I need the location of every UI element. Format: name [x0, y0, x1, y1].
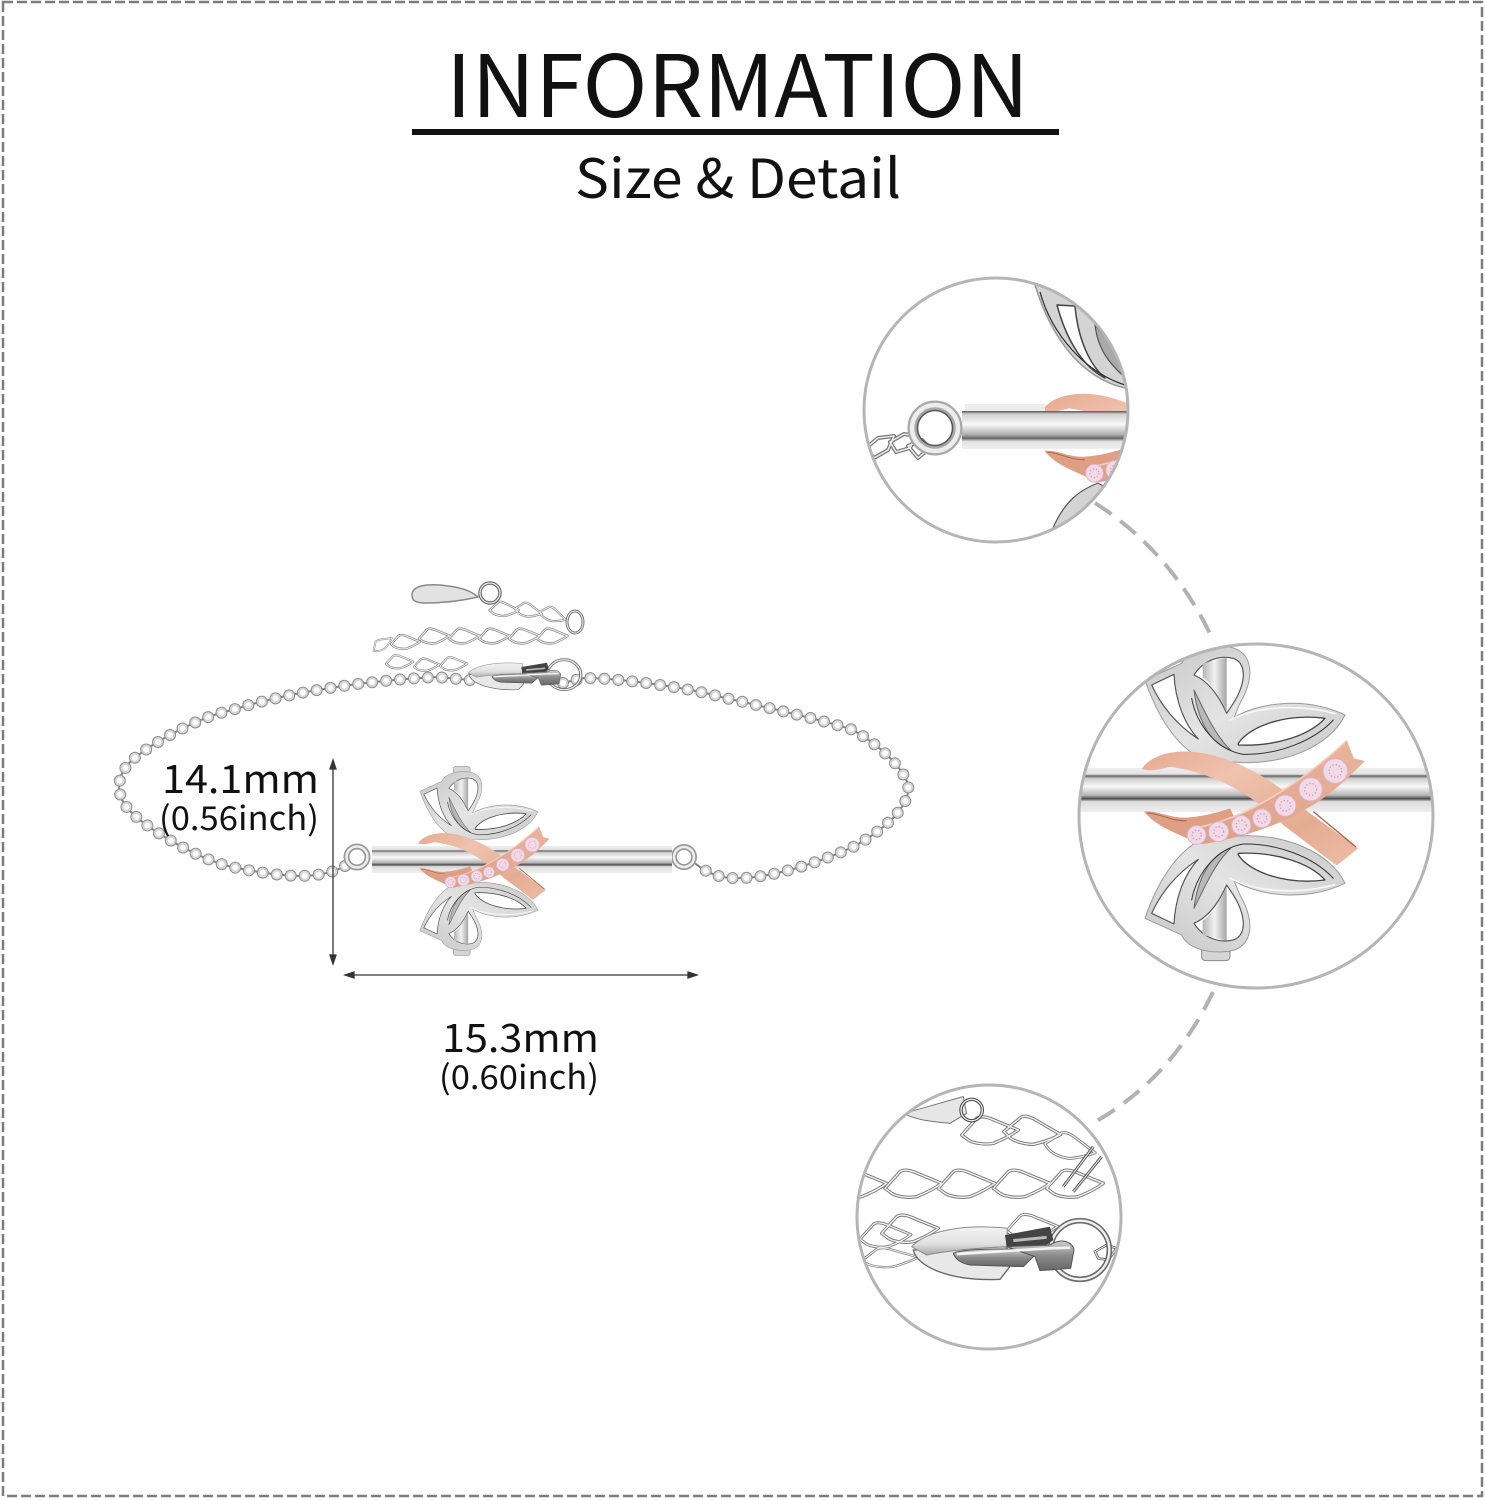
extender chain links, outer [370, 600, 568, 671]
lobster clasp [468, 660, 581, 690]
circle outline [857, 1085, 1121, 1349]
extender links, outer [830, 1114, 1103, 1267]
chain fragment [866, 434, 930, 458]
upper dashed connector [1095, 503, 1213, 640]
silver bar [372, 846, 672, 873]
ribbon fragment [1044, 394, 1126, 482]
rose gold ribbon [418, 826, 550, 900]
detail circle: bar end and ring [862, 276, 1130, 544]
width label: 15.3mm [442, 1008, 599, 1064]
width dimension arrow [345, 972, 697, 978]
lobster clasp [912, 1221, 1109, 1280]
extender links, highlight [830, 1114, 1103, 1267]
detail circle: extender chain and clasp [830, 1085, 1121, 1349]
bar [1078, 768, 1434, 812]
height label: 14.1mm [162, 749, 319, 805]
extender rings [480, 583, 583, 633]
extender tab [412, 585, 478, 603]
circle outline [1079, 644, 1433, 988]
subtitle: Size & Detail [575, 135, 901, 214]
title underline [412, 129, 1059, 135]
height label [159, 749, 319, 840]
lower dashed connector [1095, 992, 1213, 1122]
butterfly wings [1145, 638, 1345, 961]
height label: (0.56inch) [159, 792, 319, 840]
circle outline [864, 278, 1128, 542]
chain [119, 677, 908, 878]
side link [1063, 1147, 1102, 1192]
height dimension arrow [330, 760, 336, 964]
width label [439, 1008, 599, 1099]
tab end [903, 1097, 967, 1123]
wing fragment [1034, 285, 1125, 528]
right end ring [674, 847, 694, 867]
detail circle: butterfly and ribbon [1078, 638, 1434, 988]
ribbon with stones [1142, 740, 1365, 866]
bracelet illustration [119, 583, 908, 956]
bar [962, 404, 1132, 449]
end link [1095, 1245, 1117, 1260]
butterfly wings [420, 767, 538, 956]
width label: (0.60inch) [439, 1051, 599, 1099]
left end ring [346, 846, 368, 868]
ring [912, 405, 958, 451]
title: INFORMATION [446, 17, 1029, 142]
jump ring [961, 1099, 982, 1121]
extender chain links, highlight [370, 600, 568, 671]
